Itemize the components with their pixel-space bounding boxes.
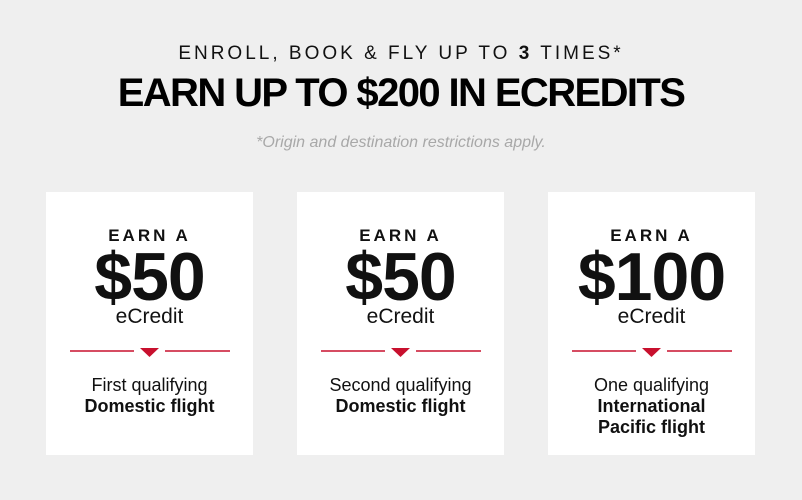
card 1: eCredit: [116, 305, 183, 328]
footnote: *Origin and destination restrictions apply.: [256, 134, 546, 151]
card 2: Second qualifying: [329, 375, 472, 395]
card 2: Domestic flight: [335, 396, 466, 416]
card 1: [46, 192, 253, 455]
subtitle: ENROLL, BOOK & FLY UP TO 3 TIMES*: [178, 43, 624, 64]
divider with arrow: [572, 348, 732, 357]
divider with arrow: [70, 348, 230, 357]
card 2: [297, 192, 504, 455]
card 3: $100: [578, 239, 725, 315]
card 1: EARN A: [108, 226, 191, 245]
card 1: Domestic flight: [84, 396, 214, 416]
card 2: eCredit: [367, 305, 434, 328]
card 3: eCredit: [618, 305, 685, 328]
card 1: First qualifying: [91, 375, 208, 395]
card 2: EARN A: [359, 226, 442, 245]
card 3: [548, 192, 755, 455]
card 3: One qualifying: [594, 375, 709, 395]
card 3: EARN A: [610, 226, 693, 245]
title: EARN UP TO $200 IN ECREDITS: [118, 71, 684, 115]
card 3: International: [597, 396, 706, 416]
card 2: $50: [345, 239, 456, 315]
card 1: $50: [94, 239, 205, 315]
divider with arrow: [321, 348, 481, 357]
card 3: Pacific flight: [598, 417, 705, 437]
